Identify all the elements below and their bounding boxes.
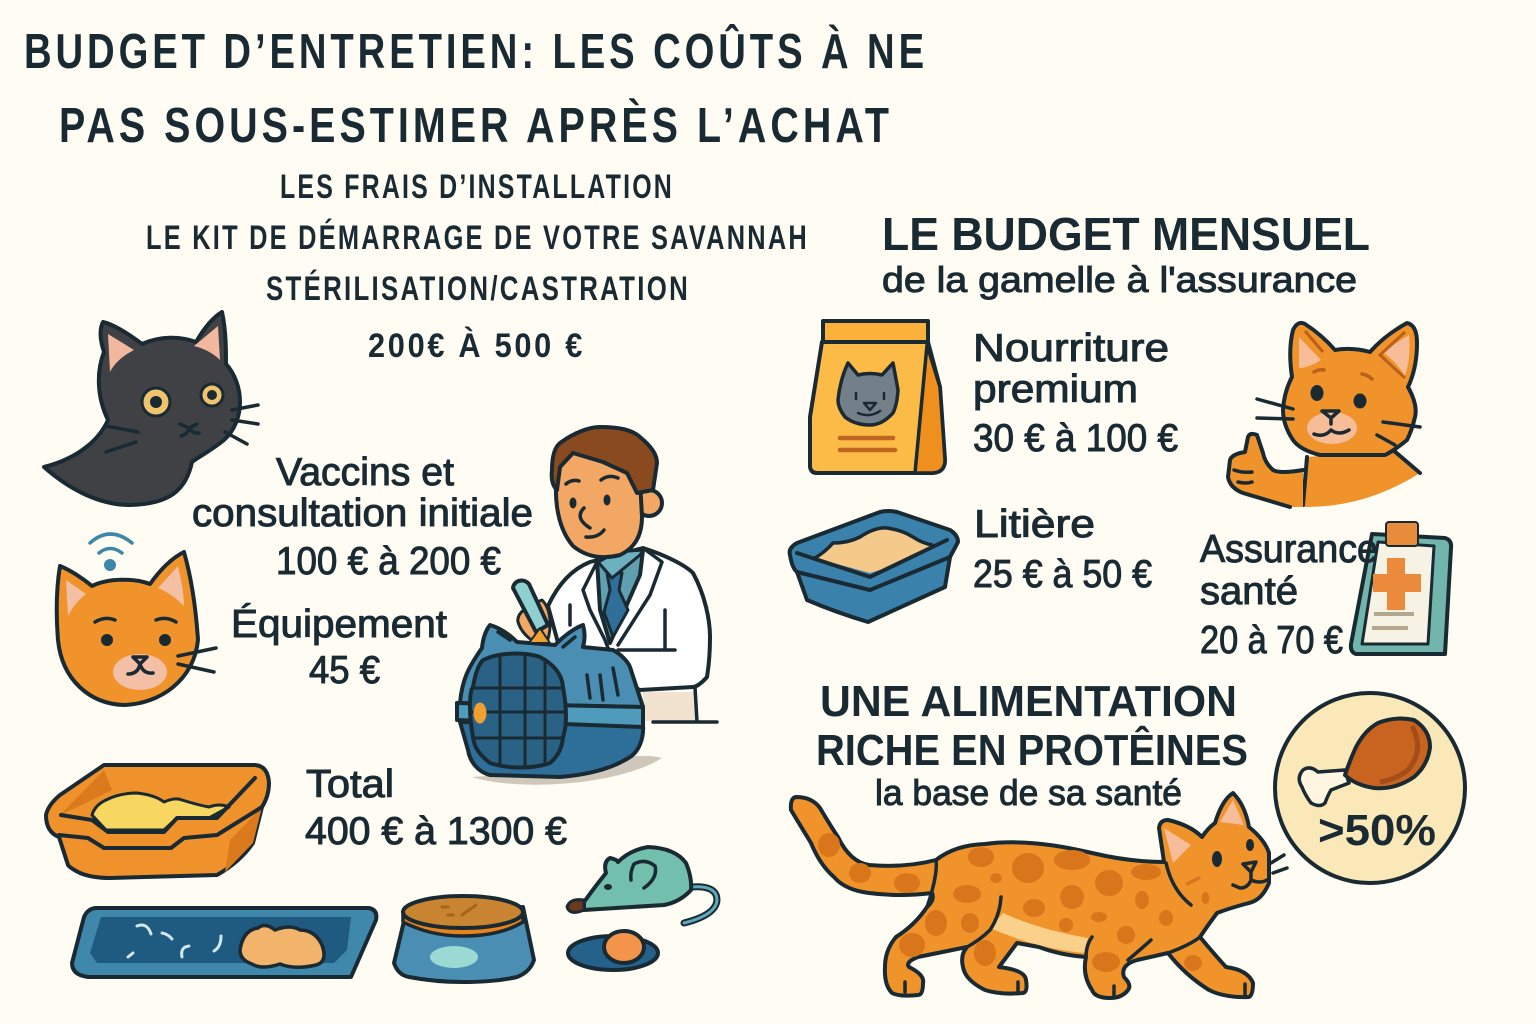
- badge: chicken leg over 50 percent: [1275, 693, 1465, 883]
- text: litter: Litière: [974, 503, 1095, 546]
- illustration: veterinarian with carrier: [457, 427, 717, 785]
- icon: food bowl: [394, 896, 534, 982]
- vet head: [552, 427, 662, 557]
- icon: insurance clipboard: [1351, 522, 1451, 654]
- illustration: savannah cat walking: [791, 793, 1287, 998]
- title: PAS SOUS-ESTIMER APRÈS L’ACHAT: [59, 99, 893, 153]
- text: total: 400 € à 1300 €: [305, 810, 567, 853]
- text: vaccines: consultation initiale: [192, 492, 533, 535]
- text: vaccines: Vaccins et: [276, 451, 454, 494]
- pet carrier: [457, 625, 643, 777]
- text: health insurance: santé: [1200, 570, 1298, 613]
- protein heading: RICHE EN PROTÊINES: [816, 725, 1248, 775]
- badge: chicken leg over 50 percent: >50%: [1318, 806, 1436, 855]
- monthly budget heading: [882, 208, 1370, 300]
- protein heading: la base de sa santé: [875, 772, 1182, 813]
- protein heading: [816, 677, 1248, 813]
- thermometer and hand: [513, 581, 550, 645]
- text: litter: [973, 503, 1152, 596]
- text: health insurance: 20 à 70 €: [1200, 619, 1343, 662]
- installation fees heading: STÉRILISATION/CASTRATION: [266, 270, 690, 308]
- icon: black cat: [44, 312, 258, 505]
- text: premium food: premium: [973, 368, 1138, 411]
- installation fees heading: 200€ À 500 €: [368, 327, 585, 365]
- icon: blue feeding mat: [72, 908, 376, 977]
- icon: orange cat with wifi: [57, 534, 216, 705]
- installation fees heading: LE KIT DE DÉMARRAGE DE VOTRE SAVANNAH: [146, 219, 809, 257]
- icon: blue litter box: [790, 511, 958, 622]
- installation fees heading: LES FRAIS D’INSTALLATION: [280, 168, 674, 206]
- text: health insurance: Assurance: [1200, 528, 1378, 571]
- text: health insurance: [1200, 528, 1378, 662]
- vet table: [643, 687, 717, 722]
- text: premium food: [973, 327, 1178, 460]
- icon: orange litter tray: [46, 765, 269, 878]
- monthly budget heading: LE BUDGET MENSUEL: [882, 208, 1370, 260]
- text: total: [305, 763, 567, 853]
- icon: orange cat thumbs up: [1228, 323, 1420, 507]
- title: [24, 24, 928, 153]
- carrier shadow: [472, 756, 662, 785]
- text: total: Total: [306, 763, 394, 806]
- icon: premium food bag: [810, 321, 945, 473]
- title: BUDGET D’ENTRETIEN: LES COÛTS À NE: [24, 24, 928, 79]
- text: premium food: 30 € à 100 €: [973, 417, 1178, 460]
- monthly budget heading: de la gamelle à l'assurance: [882, 259, 1357, 300]
- installation fees heading: [146, 168, 809, 365]
- text: vaccines: [192, 451, 533, 583]
- text: vaccines: 100 € à 200 €: [276, 540, 501, 583]
- text: equipment: [231, 603, 447, 692]
- vet coat: [548, 548, 710, 690]
- protein heading: UNE ALIMENTATION: [820, 677, 1237, 726]
- text: litter: 25 € à 50 €: [973, 553, 1152, 596]
- text: equipment: Équipement: [231, 603, 447, 646]
- icon: toy mouse: [567, 847, 717, 970]
- text: premium food: Nourriture: [973, 327, 1169, 370]
- text: equipment: 45 €: [309, 649, 380, 692]
